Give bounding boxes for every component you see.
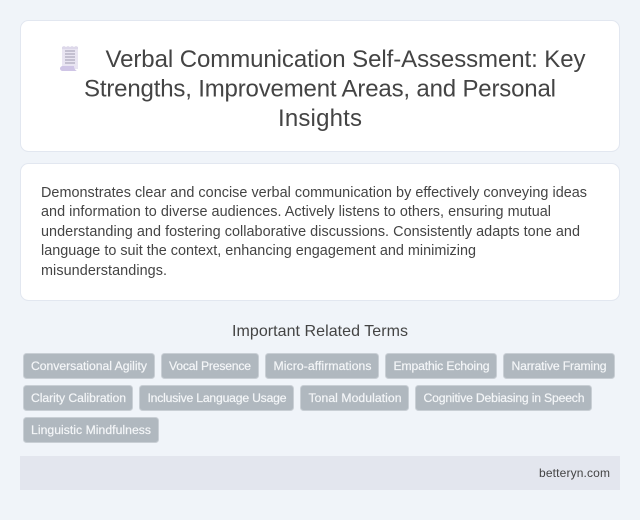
tag: Tonal Modulation: Tonal Modulation: [308, 391, 402, 405]
footer source text: betteryn.com: [539, 466, 610, 480]
tag: Linguistic Mindfulness: Linguistic Mindfulness: [31, 423, 151, 437]
tag: Conversational Agility: [24, 354, 154, 378]
tag: Cognitive Debiasing in Speech: Cognitive Debiasing in Speech: [424, 391, 584, 405]
title: Strengths, Improvement Areas, and Personal: [84, 76, 556, 102]
tag: Narrative Framing: [504, 354, 614, 378]
summary text: understanding and fostering collaborative discussions. Consistently adapts tone and: [41, 224, 580, 240]
icon: document scroll: [60, 46, 78, 71]
tag: Empathic Echoing: Empathic Echoing: [394, 359, 490, 373]
summary text: and information to diverse audiences. Actively listens to others, ensuring mutual: [41, 204, 551, 220]
tag: Narrative Framing: Narrative Framing: [512, 359, 606, 373]
summary text: misunderstandings.: [41, 263, 167, 279]
title: Insights: [278, 105, 362, 132]
tag: Tonal Modulation: [300, 386, 408, 410]
title: [84, 46, 586, 132]
panel: summary card: [20, 164, 620, 300]
tag: Vocal Presence: [162, 354, 258, 378]
tag: Cognitive Debiasing in Speech: [416, 386, 592, 410]
tag list: [24, 354, 614, 442]
summary text: language to suit the context, enhancing engagement and minimizing: [41, 243, 476, 259]
tag: Micro-affirmations: Micro-affirmations: [274, 359, 372, 373]
tag: Micro-affirmations: [266, 354, 378, 378]
tag: Linguistic Mindfulness: [24, 418, 158, 442]
tag: Conversational Agility: Conversational Agility: [31, 359, 148, 373]
summary text: Demonstrates clear and concise verbal communication by effectively conveying ideas: [41, 185, 587, 201]
tag: Clarity Calibration: [24, 386, 132, 410]
tag: Clarity Calibration: Clarity Calibration: [31, 391, 126, 405]
heading: important related terms: Important Related Terms: [232, 323, 408, 340]
tag: Vocal Presence: Vocal Presence: [169, 359, 251, 373]
tag: Inclusive Language Usage: [140, 386, 294, 410]
title: Verbal Communication Self-Assessment: Key: [106, 46, 586, 73]
tag: Empathic Echoing: [386, 354, 496, 378]
panel: title card: [20, 20, 620, 152]
summary text: [41, 185, 587, 279]
footer bar: [20, 456, 620, 490]
tag: Inclusive Language Usage: Inclusive Language Usage: [148, 391, 287, 405]
